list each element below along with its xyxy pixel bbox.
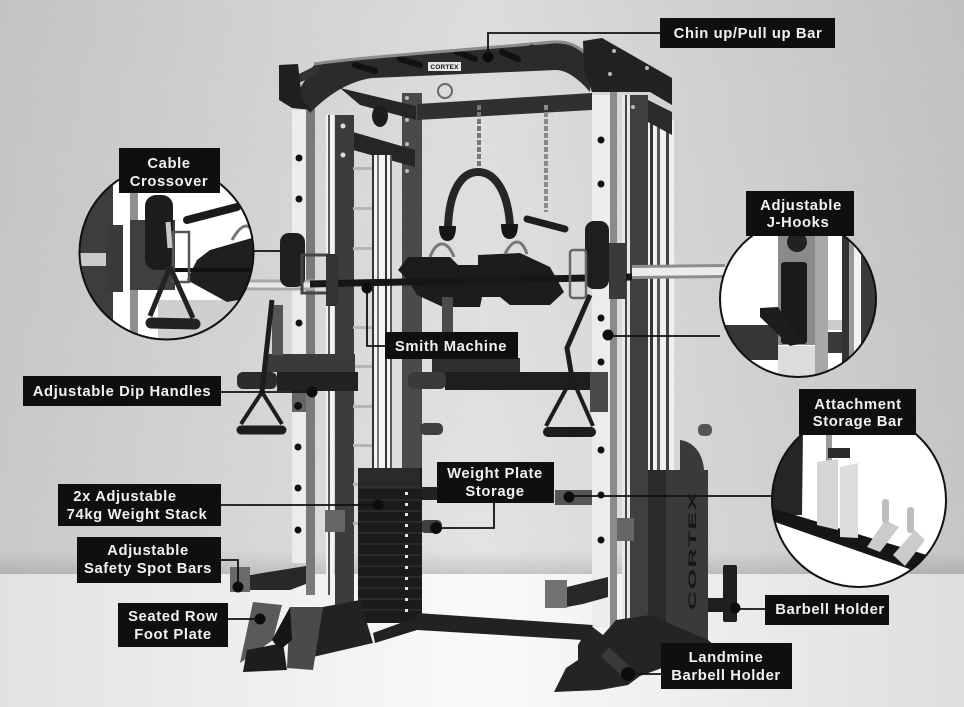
label: attachment storage bar: Storage Bar	[813, 414, 903, 430]
right strap and handle	[546, 295, 593, 432]
seat handles	[430, 242, 527, 257]
weight plate storage beam	[420, 487, 592, 505]
inset: attachment storage bar detail	[771, 433, 947, 588]
left cable pulley carriage	[280, 233, 338, 306]
label: landmine barbell holder	[661, 643, 792, 689]
ring	[438, 84, 452, 98]
seated row foot plate	[240, 602, 323, 672]
barbell holder	[708, 565, 737, 622]
label: adjustable j-hooks	[746, 191, 854, 236]
label: barbell holder	[765, 595, 889, 625]
right dark column and rails	[622, 95, 674, 630]
label: adjustable j-hooks: J-Hooks	[767, 215, 829, 231]
label: adjustable dip handles: Adjustable Dip Handles	[33, 384, 211, 400]
right cable pulley carriage	[570, 221, 626, 299]
label: 2x adjustable 74kg weight stack	[58, 484, 221, 526]
inset: adjustable j-hooks detail	[719, 236, 877, 378]
safety bars	[230, 566, 608, 608]
label: smith machine	[385, 332, 518, 359]
label: adjustable safety spot bars: Adjustable	[107, 543, 189, 559]
label: cable crossover	[119, 148, 220, 193]
label: cable crossover: Cable	[147, 156, 191, 172]
seat post	[442, 297, 453, 340]
collars	[325, 510, 634, 541]
bracket bolts	[405, 49, 649, 173]
rear cross beam	[417, 93, 592, 120]
label: adjustable j-hooks: Adjustable	[760, 198, 842, 214]
label: seated row foot plate: Foot Plate	[134, 627, 212, 643]
storage pegs	[420, 423, 712, 533]
label: cable crossover: Crossover	[130, 174, 208, 190]
label: seated row foot plate: Seated Row	[128, 609, 218, 625]
right foot and landmine base	[554, 615, 722, 692]
label: attachment storage bar: Attachment	[814, 397, 902, 413]
arch top highlight	[314, 42, 590, 64]
rear post	[402, 93, 422, 473]
label: chin up/pull up bar	[660, 18, 835, 48]
label: weight plate storage	[437, 462, 554, 503]
arch end grips	[284, 49, 568, 86]
rear pulley	[372, 105, 388, 127]
label: landmine barbell holder: Barbell Holder	[671, 668, 781, 684]
smith bar	[245, 271, 725, 285]
left strap and handle	[241, 300, 282, 430]
right white column	[592, 90, 617, 630]
label: weight plate storage: Storage	[465, 484, 525, 500]
top left bracket	[279, 64, 312, 110]
chains and rope attachment	[439, 105, 565, 241]
dip bar left	[237, 372, 358, 391]
seat pad	[398, 253, 564, 307]
top right bracket	[583, 38, 672, 105]
base frame	[313, 600, 593, 657]
smith machine frame illustration	[230, 38, 737, 692]
left white column	[292, 105, 315, 595]
cortex badge	[428, 62, 461, 71]
inset: cable crossover detail	[78, 178, 254, 340]
label: seated row foot plate	[118, 603, 228, 647]
label: 2x adjustable 74kg weight stack: 2x Adjustable	[73, 489, 177, 505]
left side beams	[340, 88, 416, 167]
label: adjustable safety spot bars: Safety Spot Bars	[84, 561, 212, 577]
label: adjustable safety spot bars	[77, 537, 221, 583]
callout lines and dots	[221, 33, 772, 681]
label: weight plate storage: Weight Plate	[447, 466, 543, 482]
plate stack	[358, 468, 422, 623]
label: attachment storage bar	[799, 389, 916, 435]
label: smith machine: Smith Machine	[395, 339, 507, 355]
cortex badge: CORTEX	[430, 64, 459, 71]
right shroud: CORTEX	[687, 491, 699, 610]
centre dip bar	[408, 358, 608, 412]
right upper beam	[648, 100, 672, 135]
ladder rails	[372, 155, 392, 470]
pull up grips	[355, 52, 518, 71]
label: adjustable dip handles	[23, 376, 221, 406]
dip pad left	[265, 305, 355, 372]
right shroud	[648, 440, 708, 640]
label: chin up/pull up bar: Chin up/Pull up Bar	[674, 26, 822, 42]
ladder rungs	[353, 167, 372, 525]
label: landmine barbell holder: Landmine	[689, 650, 763, 666]
label: 2x adjustable 74kg weight stack: 74kg Weight Stack	[67, 507, 208, 523]
left rails and dark column	[326, 115, 354, 605]
label: barbell holder: Barbell Holder	[775, 602, 885, 618]
top pull up arch	[296, 42, 590, 113]
